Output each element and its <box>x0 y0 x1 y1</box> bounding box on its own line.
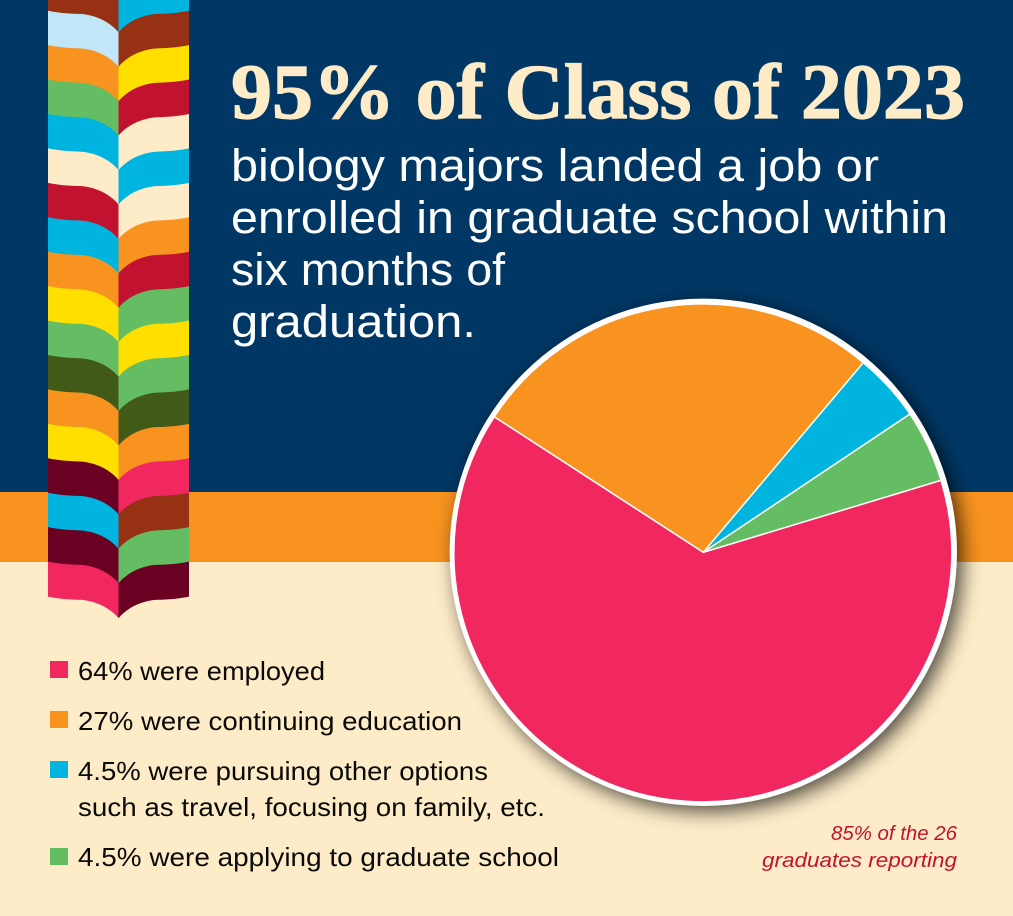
title: 95% of Class of 2023 <box>231 48 965 135</box>
subtitle text block: six months of <box>231 244 506 295</box>
legend item: other options: 4.5% were pursuing other options <box>78 756 488 786</box>
pie drop shadow <box>456 305 962 811</box>
legend <box>50 656 559 872</box>
legend item: employed: 64% were employed <box>78 656 325 686</box>
ribbon: multicoloured feather pattern <box>48 0 189 618</box>
footnote: graduates reporting <box>762 850 957 872</box>
slice: 64% employed <box>454 417 952 802</box>
footnote <box>762 823 958 872</box>
subtitle text block: biology majors landed a job or <box>231 140 879 191</box>
pie chart <box>450 299 962 811</box>
subtitle text block <box>231 140 948 347</box>
slice: 4.5% other options <box>703 363 910 552</box>
background: navy panel <box>0 0 1013 492</box>
footnote: 85% of the 26 <box>831 823 958 845</box>
legend item: continuing education: 27% were continuing education <box>78 706 462 736</box>
legend item: applying to graduate school: 4.5% were applying to graduate school <box>78 842 559 872</box>
slice: 4.5% applying to graduate school <box>703 414 941 552</box>
subtitle text block: enrolled in graduate school within <box>231 192 948 243</box>
background: cream panel <box>0 562 1013 916</box>
legend item: other options <box>50 756 545 822</box>
background: orange band <box>0 492 1013 562</box>
ribbon left column <box>48 0 118 618</box>
ribbon right column <box>118 0 189 618</box>
pie white rim <box>450 299 957 806</box>
subtitle text block: graduation. <box>231 296 476 347</box>
legend item: other options: such as travel, focusing on family, etc. <box>78 792 545 822</box>
slice: 27% continuing education <box>494 304 863 552</box>
